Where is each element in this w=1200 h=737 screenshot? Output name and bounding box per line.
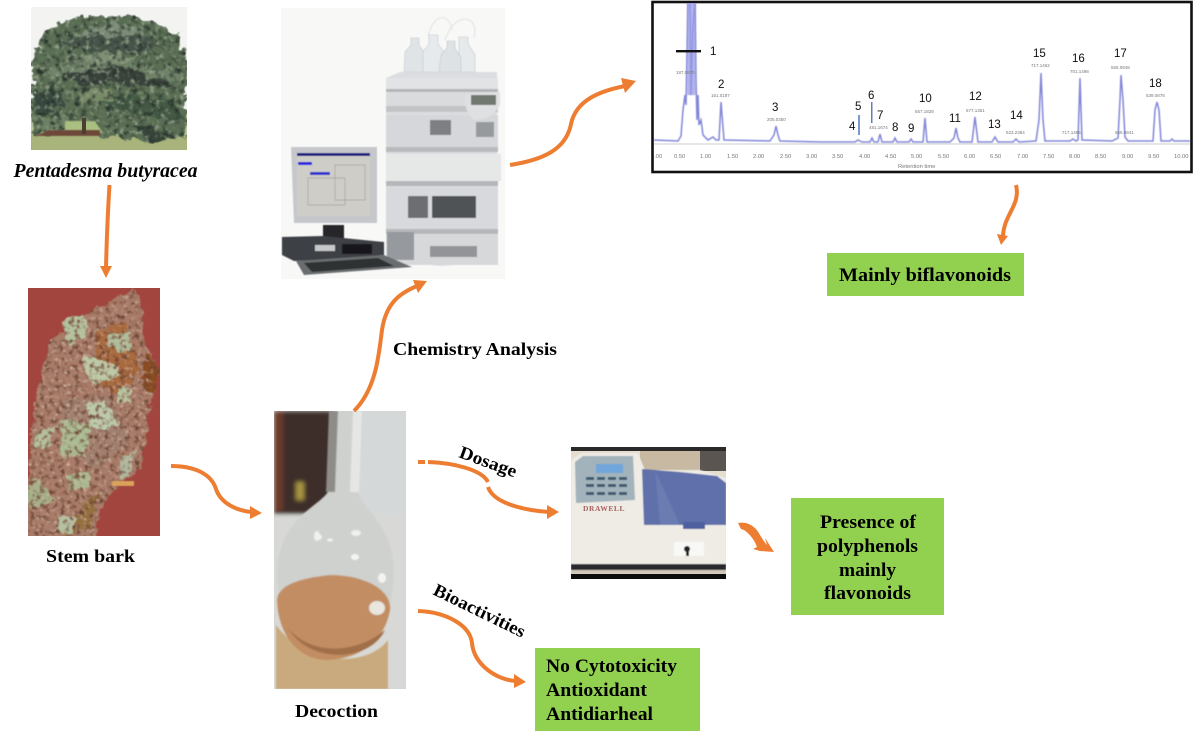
x-axis ticks: 7.50 <box>1043 154 1054 160</box>
axis <box>654 144 1190 145</box>
label: bioactivities: Bioactivities <box>430 580 529 641</box>
result box: polyphenols: mainly <box>839 560 897 581</box>
x-axis ticks: 8.00 <box>1069 154 1080 160</box>
peak m/z labels: 205.0350 <box>767 117 786 122</box>
image: HPLC instrument <box>281 8 505 279</box>
image: spectrophotometer <box>571 447 726 579</box>
x-axis ticks: 6.00 <box>964 154 975 160</box>
result box: polyphenols: Presence of <box>820 512 917 533</box>
result box: mainly biflavonoids <box>827 253 1024 296</box>
peak numbers: 13 <box>988 119 1001 131</box>
x-axis ticks: .00 <box>654 154 662 160</box>
peak m/z labels <box>676 63 1165 135</box>
peak numbers: 5 <box>855 101 861 113</box>
x-axis ticks: 7.00 <box>1017 154 1028 160</box>
arrow: decoction to spectrophotometer <box>418 462 559 519</box>
peak numbers <box>710 46 1162 135</box>
peak m/z labels: 539.0878 <box>1146 93 1165 98</box>
x-axis ticks: 1.50 <box>727 154 738 160</box>
control pad <box>465 92 500 120</box>
x-axis ticks: 3.00 <box>806 154 817 160</box>
peak m/z labels: 555.0841 <box>1115 130 1134 135</box>
x-axis ticks: 0.50 <box>674 154 685 160</box>
peak numbers: 7 <box>877 110 883 122</box>
x-axis ticks: 6.50 <box>990 154 1001 160</box>
peak numbers: 4 <box>849 121 856 133</box>
arrow: spectrophotometer to polyphenols <box>738 523 774 552</box>
arrow: chromatogram to biflavonoids <box>997 185 1017 245</box>
result box: bioactivities: Antidiarheal <box>546 705 653 725</box>
x-axis ticks: 2.50 <box>780 154 791 160</box>
peak numbers: 10 <box>919 93 932 105</box>
arrow: HPLC to chromatogram <box>510 78 636 165</box>
bottles <box>404 38 425 72</box>
result box: bioactivities: No Cytotoxicity <box>546 657 678 677</box>
x-axis ticks: 9.50 <box>1148 154 1159 160</box>
result box: polyphenols <box>791 498 944 615</box>
peak numbers: 18 <box>1149 78 1162 90</box>
peak m/z labels: 555.0848 <box>1111 65 1130 70</box>
chromatogram trace <box>654 0 1190 142</box>
x-axis ticks: 4.00 <box>859 154 870 160</box>
peak numbers: 11 <box>949 113 961 125</box>
x-axis ticks: Retention time <box>898 164 935 170</box>
x-axis ticks: 3.50 <box>832 154 843 160</box>
image: decoction flask <box>274 411 406 689</box>
x-axis ticks: 5.50 <box>938 154 949 160</box>
arrow: decoction to HPLC instrument <box>354 280 427 411</box>
peak numbers: 2 <box>718 79 724 91</box>
x-axis ticks: 10.00 <box>1174 154 1189 160</box>
result box: polyphenols: polyphenols <box>817 536 918 557</box>
result box: bioactivities: Antioxidant <box>546 681 648 701</box>
peak numbers: 8 <box>892 122 898 134</box>
brand: DRAWELL <box>583 504 625 513</box>
x-axis ticks: 1.00 <box>700 154 711 160</box>
x-axis ticks: 4.50 <box>885 154 896 160</box>
peak m/z labels: 161.0187 <box>711 93 730 98</box>
monitor <box>291 147 377 223</box>
peak numbers: 1 <box>710 46 716 58</box>
peak 1 marker <box>676 50 701 52</box>
arrow: decoction to bioactivities results <box>418 611 526 688</box>
x-axis ticks <box>654 154 1189 170</box>
peak numbers: 3 <box>772 102 778 114</box>
image: stem bark <box>24 288 160 540</box>
label: dosage: Dosage <box>457 442 520 481</box>
image: Pentadesma butyracea tree <box>31 7 187 150</box>
peak m/z labels: 717.1455 <box>1062 130 1081 135</box>
peak m/z labels: 577.1351 <box>966 108 985 113</box>
peak numbers: 6 <box>868 90 874 102</box>
x-axis ticks: 2.00 <box>753 154 764 160</box>
result box: polyphenols: flavonoids <box>824 583 911 604</box>
label: chemistry analysis: Chemistry Analysis <box>393 339 557 359</box>
result box: mainly biflavonoids: Mainly biflavonoids <box>839 266 1011 286</box>
result box: bioactivities <box>535 648 700 731</box>
peak m/z labels: 187.0870 <box>676 70 695 75</box>
peak numbers: 9 <box>908 123 914 135</box>
peak numbers: 14 <box>1010 110 1023 122</box>
computer <box>282 236 384 261</box>
peak m/z labels: 701.1498 <box>1070 69 1089 74</box>
arrow: tree to stem bark <box>100 185 112 278</box>
blue peak markers <box>858 115 860 135</box>
peak m/z labels: 717.1462 <box>1031 63 1050 68</box>
peak m/z labels: 557.1828 <box>915 109 934 114</box>
stack <box>386 72 498 266</box>
x-axis ticks: 5.00 <box>911 154 922 160</box>
peak numbers: 15 <box>1033 48 1046 60</box>
arrow: stem bark to decoction <box>171 466 262 519</box>
peak m/z labels: 523.2384 <box>1006 130 1025 135</box>
x-axis ticks: 8.50 <box>1095 154 1106 160</box>
peak numbers: 12 <box>969 91 982 103</box>
label: Pentadesma butyracea: Pentadesma butyracea <box>13 160 198 182</box>
peak numbers: 16 <box>1072 53 1085 65</box>
chart: chromatogram <box>652 0 1192 172</box>
label: decoction: Decoction <box>295 701 378 721</box>
peak m/z labels: 481.1674 <box>869 125 888 130</box>
x-axis ticks: 9.00 <box>1122 154 1133 160</box>
keyboard <box>296 255 412 275</box>
peak numbers: 17 <box>1114 48 1127 60</box>
label: stem bark: Stem bark <box>46 546 135 566</box>
